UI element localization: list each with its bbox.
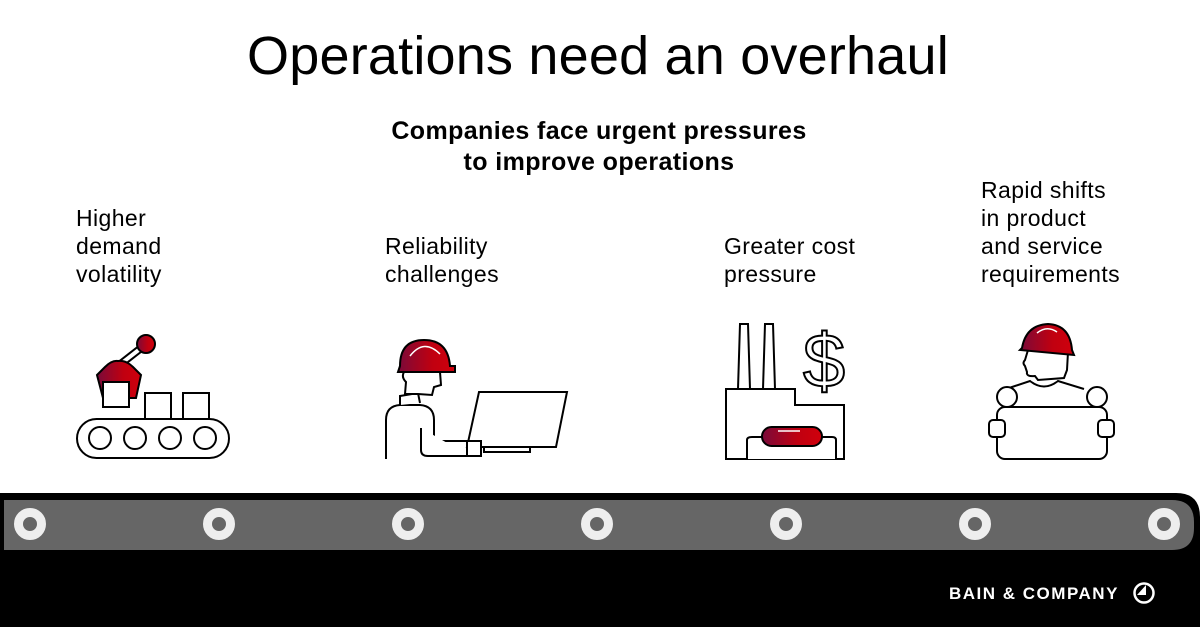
subtitle: to improve operations [464, 148, 734, 176]
label: demand volatility [76, 205, 162, 287]
label: rapid shifts: and service [981, 233, 1103, 259]
label: demand volatility: Higher [76, 205, 146, 231]
label: reliability: challenges [385, 261, 499, 287]
icon: factory with dollar: $ [803, 319, 845, 404]
label: rapid shifts: Rapid shifts [981, 177, 1106, 203]
icon: worker at laptop [386, 340, 567, 459]
logo: BAIN & COMPANY [949, 584, 1119, 603]
label: demand volatility: volatility [76, 261, 162, 287]
label: rapid shifts: in product [981, 205, 1086, 231]
icon: worker holding sign [989, 324, 1114, 459]
conveyor belt [0, 493, 1200, 627]
icon: robotic conveyor [77, 335, 229, 458]
label: reliability: Reliability [385, 233, 488, 259]
icon: factory with dollar [726, 319, 845, 459]
subtitle: Companies face urgent pressures [391, 117, 807, 145]
title: Operations need an overhaul [247, 26, 949, 86]
label: demand volatility: demand [76, 233, 162, 259]
label: rapid shifts: requirements [981, 261, 1120, 287]
subtitle [391, 117, 807, 176]
label: cost: pressure [724, 261, 817, 287]
label: cost [724, 233, 855, 287]
label: cost: Greater cost [724, 233, 855, 259]
label: reliability [385, 233, 499, 287]
label: rapid shifts [981, 177, 1120, 287]
